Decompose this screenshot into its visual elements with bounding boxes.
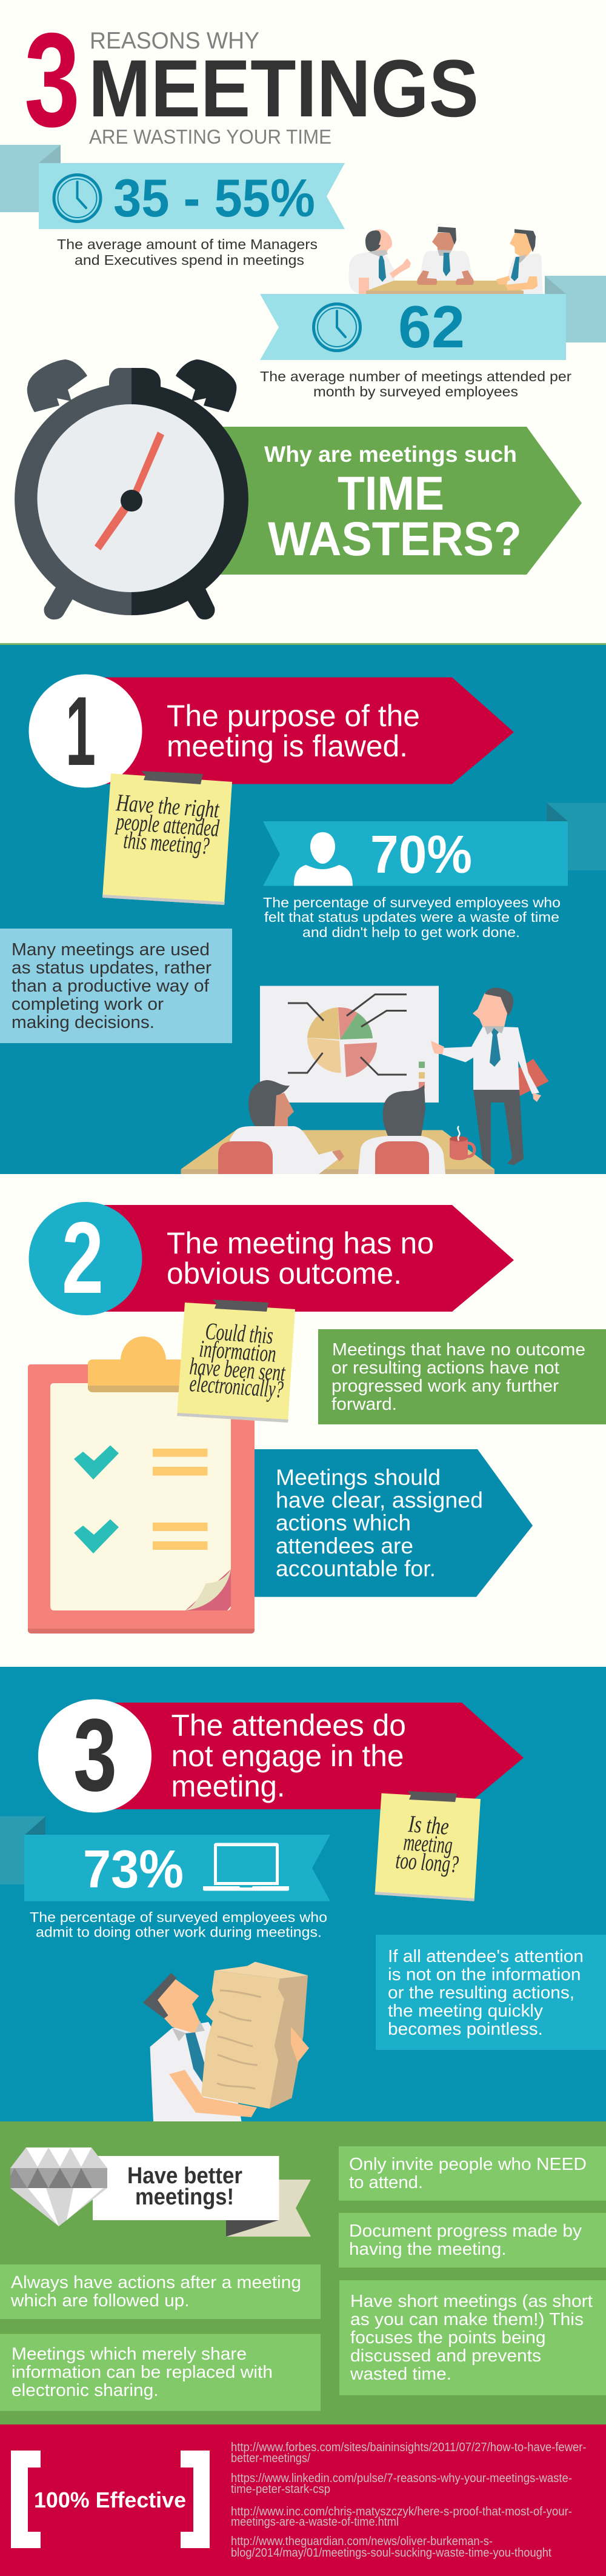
text box: status updates: as status updates, rather xyxy=(12,958,211,978)
tip: short meetings xyxy=(339,2280,606,2395)
sources: blog/2014/may/01/meetings-soul-sucking-waste-time-you-thought xyxy=(231,2546,551,2560)
text: meetings per month description: The average number of meetings attended per xyxy=(260,369,571,384)
heading arrow: reason 1: 1 xyxy=(65,676,96,786)
text box: attention xyxy=(376,1935,606,2050)
sticky note: too long xyxy=(375,1791,481,1901)
icon: laptop xyxy=(203,1843,289,1891)
person left xyxy=(348,230,411,294)
whiteboard with pie chart xyxy=(260,986,439,1103)
checklist xyxy=(74,1445,207,1553)
heading arrow: reason 2: obvious outcome. xyxy=(167,1256,402,1290)
clock face xyxy=(38,404,224,592)
tip: document progress: having the meeting. xyxy=(349,2240,507,2259)
tip: electronic sharing xyxy=(0,2334,321,2411)
text box: attention: is not on the information xyxy=(388,1965,581,1984)
text: 70% description xyxy=(263,895,561,940)
table xyxy=(181,1130,494,1174)
arrow: clear actions: attendees are xyxy=(276,1533,413,1558)
sources: http://www.theguardian.com/news/oliver-burkeman-s- xyxy=(231,2535,493,2548)
ribbon: 35 - 55% xyxy=(0,145,345,229)
text box: attention: becomes pointless. xyxy=(388,2020,543,2039)
text box: no outcome xyxy=(318,1329,606,1424)
illustration: people at table xyxy=(348,227,543,294)
arrow: clear actions: have clear, assigned xyxy=(276,1487,483,1513)
tip: short meetings: discussed and prevents xyxy=(350,2346,541,2366)
sticky note: right people: people attended xyxy=(114,807,221,842)
tip: only invite xyxy=(339,2146,606,2201)
ribbon: 35 - 55%: 35 - 55% xyxy=(113,168,315,228)
text: managers stat description: The average amount of time Managers xyxy=(57,236,318,252)
sticky note: sent electronically: have been sent xyxy=(188,1352,287,1386)
heading arrow: reason 3 xyxy=(38,1698,524,1813)
sticky note: sent electronically: information xyxy=(198,1335,277,1367)
left bell and leg xyxy=(27,359,132,619)
sticky note: right people: this meeting? xyxy=(122,826,210,859)
tip: only invite: to attend. xyxy=(349,2173,423,2192)
sources: http://www.forbes.com/sites/baininsights/2011/07/27/how-to-have-fewer- xyxy=(231,2441,587,2454)
icon: clock xyxy=(54,175,101,222)
sticky note: too long: Is the xyxy=(407,1810,450,1840)
text box: status updates: completing work or xyxy=(12,995,164,1014)
coffee mug xyxy=(450,1126,474,1160)
sources: time-peter-stark-csp xyxy=(231,2483,330,2496)
text: 73% description: The percentage of surveyed employees who xyxy=(30,1909,327,1925)
sources: http://www.inc.com/chris-matyszczyk/here-s-proof-that-most-of-your- xyxy=(231,2505,572,2518)
badge: 100% effective: 100% Effective xyxy=(34,2488,186,2512)
sticky note: right people xyxy=(102,771,232,905)
person center xyxy=(417,227,474,285)
text box: no outcome: or resulting actions have not xyxy=(331,1358,559,1378)
arrow: clear actions xyxy=(248,1449,533,1597)
tip: short meetings: as you can make them!) This xyxy=(350,2310,584,2329)
arrow: why are meetings such time wasters: TIME xyxy=(338,466,444,520)
text box: status updates: making decisions. xyxy=(12,1013,155,1032)
text box: no outcome: forward. xyxy=(331,1395,397,1414)
heading arrow: reason 2 xyxy=(29,1201,514,1315)
seated person right xyxy=(358,1085,445,1174)
sticky note: too long: too long? xyxy=(395,1846,459,1878)
panel: have better meetings xyxy=(0,2121,606,2424)
ribbon: have better meetings: Have better xyxy=(127,2163,242,2189)
tip: short meetings: focuses the points being xyxy=(350,2328,545,2347)
icon: clock xyxy=(314,304,360,350)
arrow: clear actions: Meetings should xyxy=(276,1465,441,1490)
text: managers stat description xyxy=(57,236,318,268)
heading arrow: reason 1: The purpose of the xyxy=(167,699,420,733)
arrow: clear actions: actions which xyxy=(276,1510,411,1535)
text box: attention: the meeting quickly xyxy=(388,2001,544,2021)
person right xyxy=(496,229,543,294)
tip: electronic sharing: information can be replaced with xyxy=(12,2363,273,2382)
table xyxy=(366,278,538,294)
arrow: why are meetings such time wasters xyxy=(218,427,582,575)
arrow: clear actions: accountable for. xyxy=(276,1557,436,1581)
sticky note: sent electronically xyxy=(177,1300,295,1423)
text: meetings per month description xyxy=(260,369,571,399)
heading arrow: reason 3: 3 xyxy=(73,1698,117,1813)
text box: no outcome: progressed work any further xyxy=(331,1376,559,1396)
tip: electronic sharing: Meetings which merely share xyxy=(12,2344,247,2364)
ribbon back: 62 xyxy=(545,276,606,342)
text box: no outcome: Meetings that have no outcome xyxy=(332,1340,585,1360)
icon: alarm clock xyxy=(15,359,248,619)
title: ARE WASTING YOUR TIME xyxy=(89,125,331,148)
text box: status updates xyxy=(0,929,232,1043)
text: 70% description: and didn't help to get work done. xyxy=(302,924,520,940)
heading arrow: reason 1: meeting is flawed. xyxy=(167,729,408,763)
presenter xyxy=(431,987,549,1165)
panel: reason 1 xyxy=(0,643,606,1174)
title: 3 xyxy=(24,5,80,155)
heading arrow: reason 3: The attendees do xyxy=(171,1708,406,1742)
title: REASONS WHY xyxy=(90,28,259,54)
tip: short meetings: wasted time. xyxy=(350,2364,451,2384)
title xyxy=(24,5,479,155)
panel: reason 2 xyxy=(28,1201,606,1633)
panel: reason 3 xyxy=(0,1667,606,2121)
text: 73% description xyxy=(30,1909,327,1940)
ribbon: 70%: 70% xyxy=(370,824,472,884)
illustration: man with paper stack xyxy=(143,1962,309,2121)
text: managers stat description: and Executives spend in meetings xyxy=(75,252,304,268)
right bell and leg xyxy=(132,359,236,619)
clip xyxy=(88,1336,194,1392)
text box: attention: If all attendee's attention xyxy=(388,1947,584,1966)
icon: clipboard xyxy=(28,1336,255,1633)
tip: always have actions xyxy=(0,2264,321,2319)
tip: always have actions: Always have actions after a meeting xyxy=(11,2273,301,2292)
sticky note: right people: Have the right xyxy=(115,789,221,823)
arrow: why are meetings such time wasters: WASTERS? xyxy=(268,512,522,566)
heading arrow: reason 2: The meeting has no xyxy=(167,1226,434,1260)
arrow: why are meetings such time wasters: Why are meetings such xyxy=(264,442,517,467)
illustration: presentation scene xyxy=(181,986,549,1174)
sources: better-meetings/ xyxy=(231,2452,310,2465)
ribbon: 62: 62 xyxy=(398,293,465,360)
sources xyxy=(231,2441,587,2560)
sticky note: too long: meeting xyxy=(402,1828,453,1859)
tip: document progress xyxy=(339,2213,606,2267)
clock body xyxy=(15,383,132,615)
sources: meetings-are-a-waste-of-time.html xyxy=(231,2515,399,2529)
text box: attention: or the resulting actions, xyxy=(388,1983,574,2003)
title: MEETINGS xyxy=(88,44,479,134)
text: 73% description: admit to doing other work during meetings. xyxy=(36,1924,322,1940)
ribbon: 73% xyxy=(0,1816,330,1901)
ribbon: 73%: 73% xyxy=(83,1839,184,1899)
tip: only invite: Only invite people who NEED xyxy=(349,2155,587,2174)
seated person left xyxy=(218,1080,344,1174)
sticky note: sent electronically: electronically? xyxy=(188,1369,284,1403)
text: 70% description: The percentage of surveyed employees who xyxy=(263,895,561,910)
clock hands xyxy=(132,432,164,494)
heading arrow: reason 3: not engage in the xyxy=(171,1739,404,1773)
tip: electronic sharing: electronic sharing. xyxy=(12,2381,159,2400)
icon: diamond xyxy=(10,2147,107,2226)
text box: status updates: than a productive way of xyxy=(12,976,210,996)
heading arrow: reason 2: 2 xyxy=(62,1201,104,1315)
sticky note: sent electronically: Could this xyxy=(204,1317,274,1349)
badge: 100% effective xyxy=(11,2451,210,2548)
tip: document progress: Document progress made by xyxy=(349,2221,582,2241)
icon: person xyxy=(294,832,353,886)
ribbon: have better meetings xyxy=(93,2156,311,2237)
ribbon: 70% xyxy=(263,802,606,886)
heading arrow: reason 3: meeting. xyxy=(171,1769,285,1803)
tip: short meetings: Have short meetings (as short xyxy=(350,2292,593,2311)
text: 70% description: felt that status updates were a waste of time xyxy=(264,909,559,925)
panel: footer xyxy=(0,2424,606,2576)
heading arrow: reason 1 xyxy=(29,674,514,788)
ribbon: have better meetings: meetings! xyxy=(135,2184,234,2210)
tip: always have actions: which are followed up. xyxy=(10,2291,190,2311)
ribbon: 62 xyxy=(260,293,566,360)
sources: https://www.linkedin.com/pulse/7-reasons-why-your-meetings-waste- xyxy=(231,2472,572,2485)
text: meetings per month description: month by surveyed employees xyxy=(313,384,518,399)
text box: status updates: Many meetings are used xyxy=(12,940,210,959)
